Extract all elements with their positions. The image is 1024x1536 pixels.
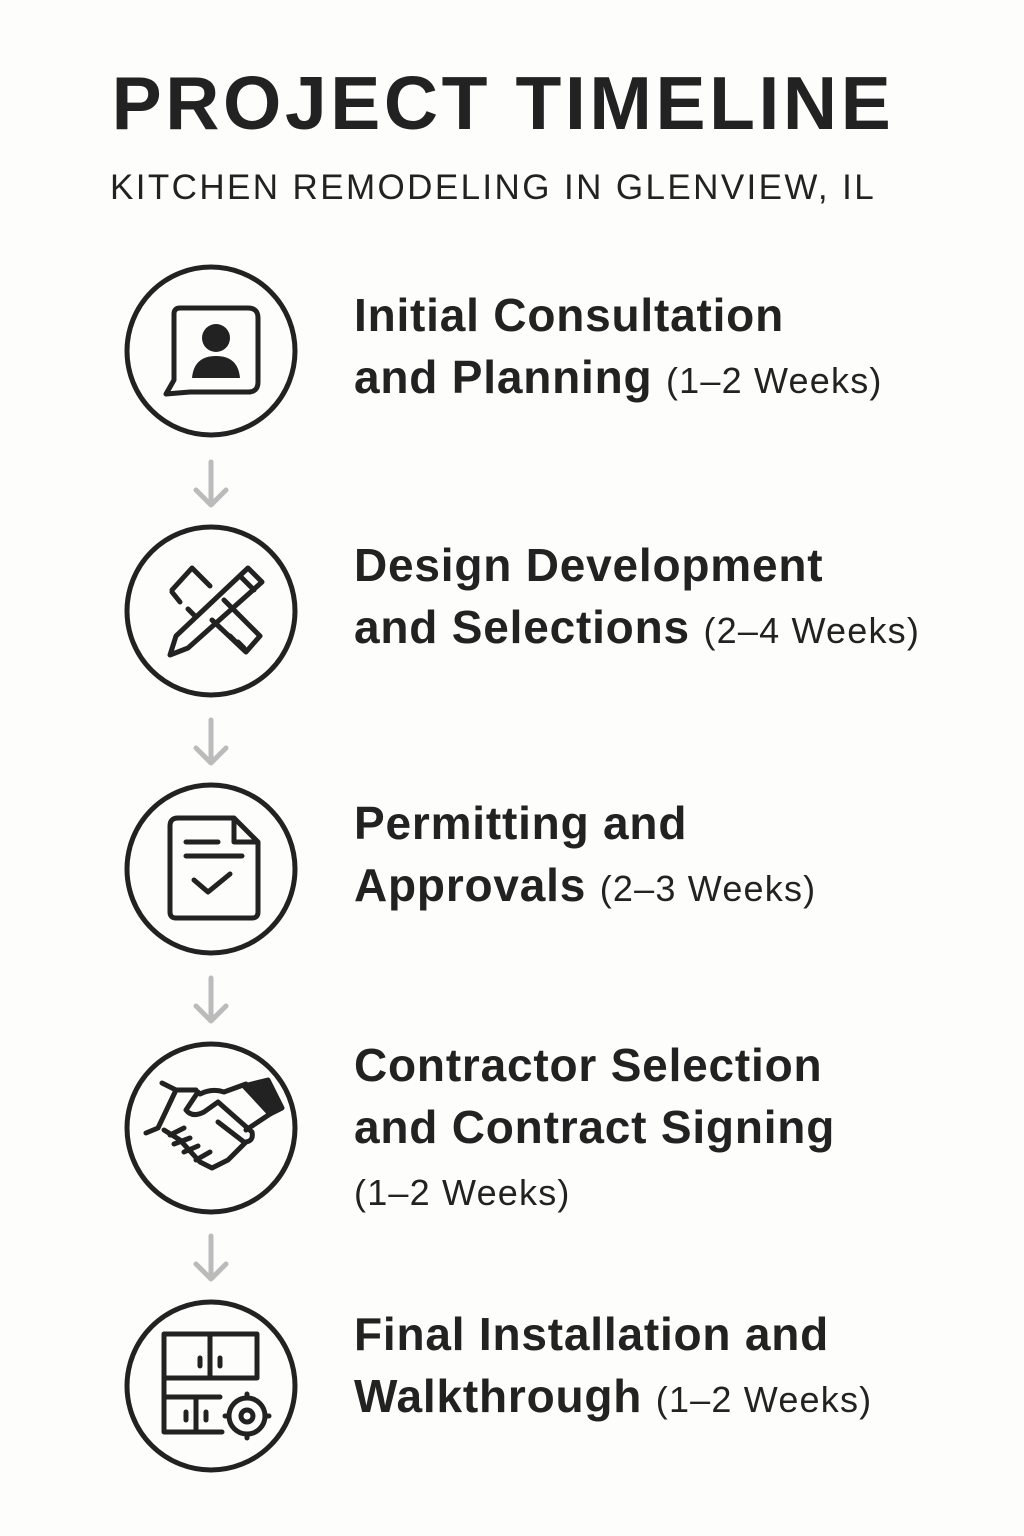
step 1 text: Initial Consultation xyxy=(354,289,784,341)
step 1 text xyxy=(354,289,883,403)
step 5 text: Final Installation and xyxy=(354,1308,829,1360)
step 2 text xyxy=(354,539,920,653)
step 1 text: and Planning (1–2 Weeks) xyxy=(354,351,883,403)
step 3 text: Permitting and xyxy=(354,797,687,849)
step 3 text: Approvals (2–3 Weeks) xyxy=(354,859,816,911)
step 2 text: and Selections (2–4 Weeks) xyxy=(354,601,920,653)
step 4 text: and Contract Signing xyxy=(354,1101,835,1153)
step 4 text: (1–2 Weeks) xyxy=(354,1172,571,1213)
icon: document xyxy=(127,785,295,953)
step 5 text: Walkthrough (1–2 Weeks) xyxy=(354,1370,872,1422)
arrow 4 xyxy=(196,1236,226,1279)
step 3 text xyxy=(354,797,816,911)
icon: handshake xyxy=(127,1044,295,1212)
arrow 3 xyxy=(196,978,226,1021)
icon: consultation xyxy=(127,267,295,435)
title: PROJECT TIMELINE xyxy=(112,61,894,145)
step 4 text: Contractor Selection xyxy=(354,1039,822,1091)
arrow 1 xyxy=(196,462,226,505)
icon: cabinets xyxy=(127,1302,295,1470)
step 2 text: Design Development xyxy=(354,539,823,591)
arrow 2 xyxy=(196,720,226,763)
step 4 text xyxy=(354,1039,835,1213)
icon: design xyxy=(127,527,295,695)
step 5 text xyxy=(354,1308,872,1422)
subtitle: KITCHEN REMODELING IN GLENVIEW, IL xyxy=(110,168,876,207)
